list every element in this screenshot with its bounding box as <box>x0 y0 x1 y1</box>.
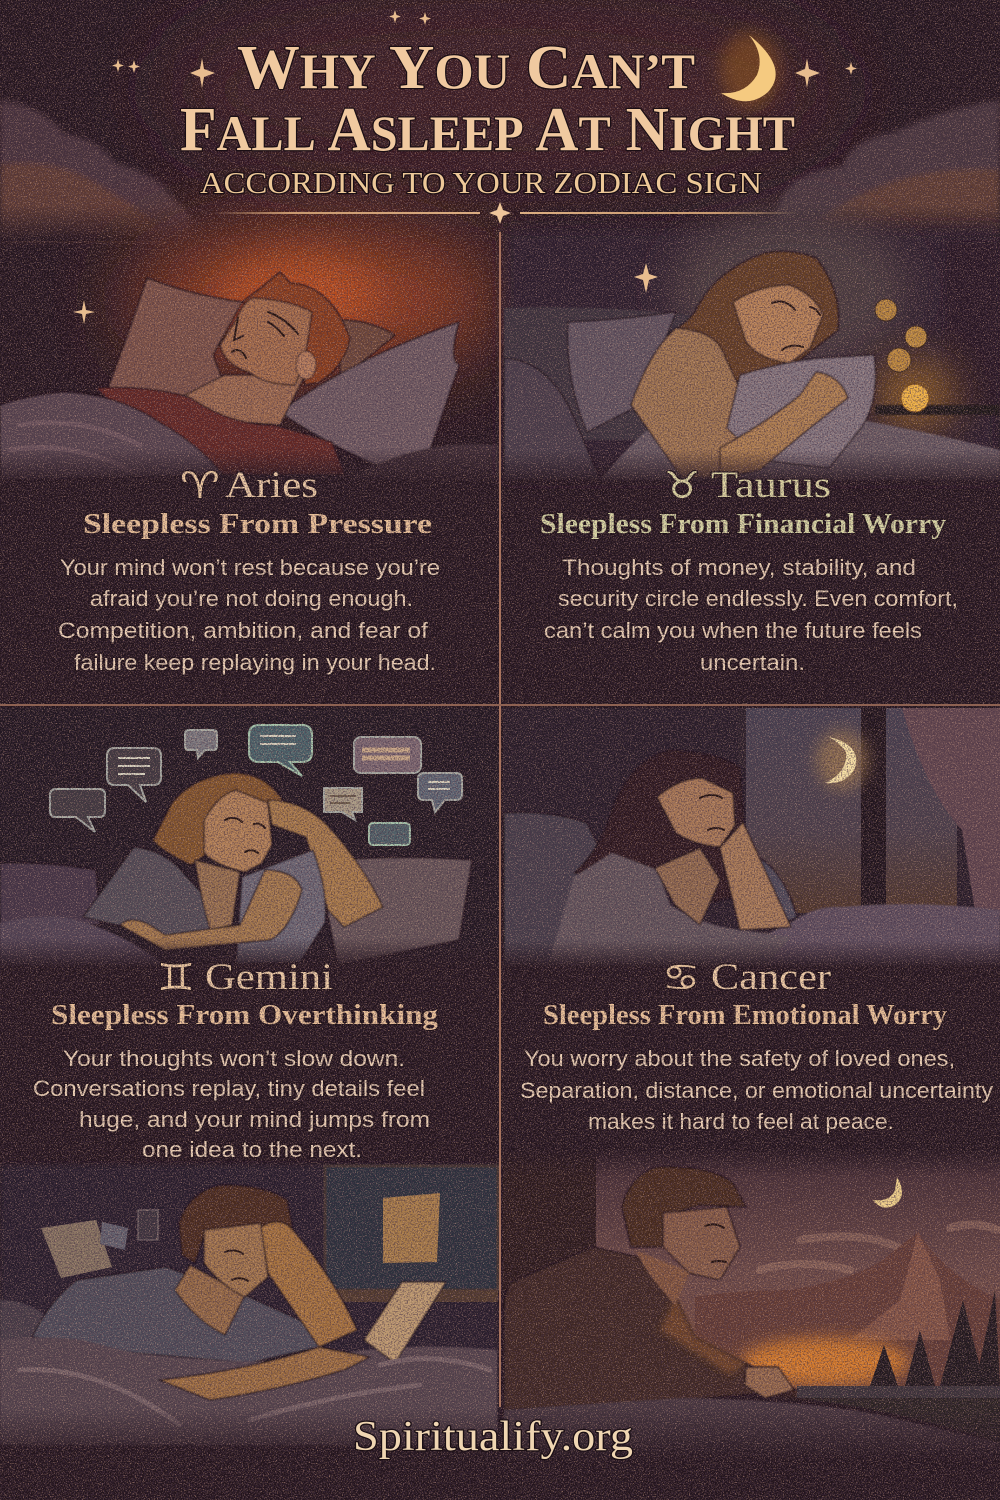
panel: Aries text <box>58 464 440 675</box>
blanket <box>0 1338 497 1445</box>
pillow right <box>280 322 459 465</box>
Taurus description: security circle endlessly. Even comfort, <box>558 586 958 611</box>
panel: Cancer text <box>520 956 993 1134</box>
Cancer description: makes it hard to feel at peace. <box>588 1109 894 1134</box>
bubble text lines <box>118 736 450 803</box>
lower blanket <box>0 917 166 966</box>
Aries sign and name: ♈︎ <box>180 464 220 507</box>
neck <box>175 1265 245 1335</box>
neck <box>185 375 305 425</box>
face <box>204 1223 268 1297</box>
blanket <box>504 1398 1000 1470</box>
arm <box>720 822 791 930</box>
chest <box>655 848 720 925</box>
shoulder and arm <box>631 328 746 478</box>
night sky and clouds <box>0 0 1000 241</box>
panel: Gemini bottom illustration <box>0 1165 498 1445</box>
icon: crescent moon <box>720 32 780 108</box>
blanket folds <box>10 422 140 470</box>
blanket <box>504 358 600 480</box>
pillow right <box>740 853 797 930</box>
shirt <box>83 847 223 945</box>
facial features <box>772 302 820 350</box>
Aries sign and name: Aries <box>225 465 318 506</box>
Gemini subtitle: Sleepless From Overthinking <box>51 1000 438 1031</box>
panel: Taurus illustration <box>503 210 1000 485</box>
Aries sign and name <box>180 464 318 507</box>
Gemini description: Conversations replay, tiny details feel <box>33 1076 425 1101</box>
curtain <box>902 708 1000 915</box>
blanket folds <box>20 1359 490 1425</box>
Cancer description: Separation, distance, or emotional uncertainty <box>520 1078 993 1103</box>
hair <box>622 1167 746 1247</box>
title divider <box>210 202 800 224</box>
face <box>657 778 735 847</box>
hand and forearm <box>120 870 302 950</box>
Cancer description <box>520 1046 993 1134</box>
Aries description: Your mind won’t rest because you’re <box>60 555 440 580</box>
Taurus description: can’t calm you when the future feels <box>544 618 922 643</box>
sky top fade <box>503 1148 1000 1178</box>
Gemini description: huge, and your mind jumps from <box>79 1107 430 1132</box>
bed back <box>504 307 700 440</box>
title: WHY YOU CAN’T <box>237 34 695 102</box>
raised arm <box>261 1222 357 1347</box>
hair <box>153 773 285 865</box>
face <box>204 790 272 872</box>
face <box>733 285 823 363</box>
facial features <box>225 1250 248 1281</box>
forearm <box>159 1347 370 1400</box>
window sill <box>325 1290 498 1302</box>
title <box>180 34 795 164</box>
footer brand: Spiritualify.org <box>353 1414 633 1460</box>
Taurus description <box>544 555 958 675</box>
blanket <box>700 904 1000 966</box>
blanket <box>0 392 223 480</box>
hoodie lit edge <box>660 1297 746 1375</box>
window ledge <box>797 1386 1000 1398</box>
Gemini sign and name <box>157 956 333 999</box>
hand <box>745 1367 794 1398</box>
speech bubbles <box>50 725 462 845</box>
window <box>325 1166 498 1290</box>
forearm and hand <box>720 372 848 478</box>
facial features <box>232 312 298 358</box>
panel: Gemini text <box>33 956 438 1162</box>
Gemini sign and name: ♊︎ <box>157 956 195 999</box>
ear <box>296 351 316 379</box>
Cancer sign and name: ♋︎ <box>662 956 700 999</box>
bottom footer band <box>0 1408 1000 1500</box>
Aries description <box>58 555 440 675</box>
pillow back <box>568 312 676 432</box>
face <box>220 298 312 385</box>
panel: Taurus text <box>540 464 958 675</box>
hugged pillow <box>727 355 875 468</box>
shirt <box>96 387 345 475</box>
neck and chest <box>195 860 240 930</box>
panel: Cancer bottom illustration <box>503 1148 1000 1470</box>
panel: Cancer top illustration <box>503 708 1000 968</box>
body <box>548 853 791 966</box>
Taurus sign and name: ♉︎ <box>664 464 700 507</box>
hair <box>242 272 350 385</box>
moon <box>873 1177 902 1208</box>
panel: Aries illustration <box>0 225 500 484</box>
nightstand <box>875 405 1000 415</box>
Taurus sign and name <box>664 464 831 507</box>
hair <box>670 251 839 385</box>
title: FALL ASLEEP AT NIGHT <box>180 96 795 164</box>
Taurus description: Thoughts of money, stability, and <box>562 555 916 580</box>
hugged pillow <box>236 850 326 964</box>
Cancer sign and name: Cancer <box>711 957 831 998</box>
Aries description: Competition, ambition, and fear of <box>58 618 429 643</box>
clouds <box>760 1224 998 1270</box>
window panes <box>738 708 957 918</box>
hair <box>574 750 745 905</box>
wall notes <box>41 1193 440 1278</box>
mountain <box>695 1232 1000 1386</box>
trees <box>870 1290 1000 1386</box>
neck <box>635 1250 690 1305</box>
Cancer subtitle: Sleepless From Emotional Worry <box>543 1000 947 1031</box>
Gemini description <box>33 1046 430 1162</box>
pillow left <box>108 278 242 400</box>
mountain ridge <box>850 1232 950 1340</box>
facial features <box>225 818 265 853</box>
moon <box>825 737 856 783</box>
panel: Gemini top illustration <box>0 708 498 968</box>
pillow left <box>504 812 600 966</box>
Taurus subtitle: Sleepless From Financial Worry <box>540 509 946 540</box>
Gemini description: Your thoughts won’t slow down. <box>63 1046 405 1071</box>
facial features <box>705 1224 726 1262</box>
Cancer description: You worry about the safety of loved ones, <box>524 1046 955 1071</box>
Aries subtitle: Sleepless From Pressure <box>83 509 432 540</box>
shirt <box>32 1267 319 1363</box>
city lights <box>740 1338 910 1386</box>
far bed <box>0 1300 50 1345</box>
icon: sparkles <box>73 10 857 324</box>
face <box>663 1207 740 1280</box>
facial features <box>700 795 724 830</box>
far blanket <box>0 863 100 925</box>
Cancer sign and name <box>662 956 831 999</box>
paper in hand <box>364 1282 446 1363</box>
coins <box>875 299 929 412</box>
subtitle: ACCORDING TO YOUR ZODIAC SIGN <box>200 165 762 200</box>
Gemini sign and name: Gemini <box>205 957 333 998</box>
Aries description: afraid you’re not doing enough. <box>90 586 413 611</box>
Gemini description: one idea to the next. <box>142 1137 362 1162</box>
moon glow <box>816 730 868 790</box>
Taurus description: uncertain. <box>700 650 805 675</box>
Aries description: failure keep replaying in your head. <box>74 650 436 675</box>
hair <box>179 1185 293 1263</box>
hoodie <box>504 1247 797 1410</box>
Taurus sign and name: Taurus <box>711 465 831 506</box>
pillow back sliver <box>340 320 395 380</box>
right pillow <box>325 858 472 965</box>
panel dividers <box>0 232 1000 1407</box>
raised arm <box>268 800 383 927</box>
